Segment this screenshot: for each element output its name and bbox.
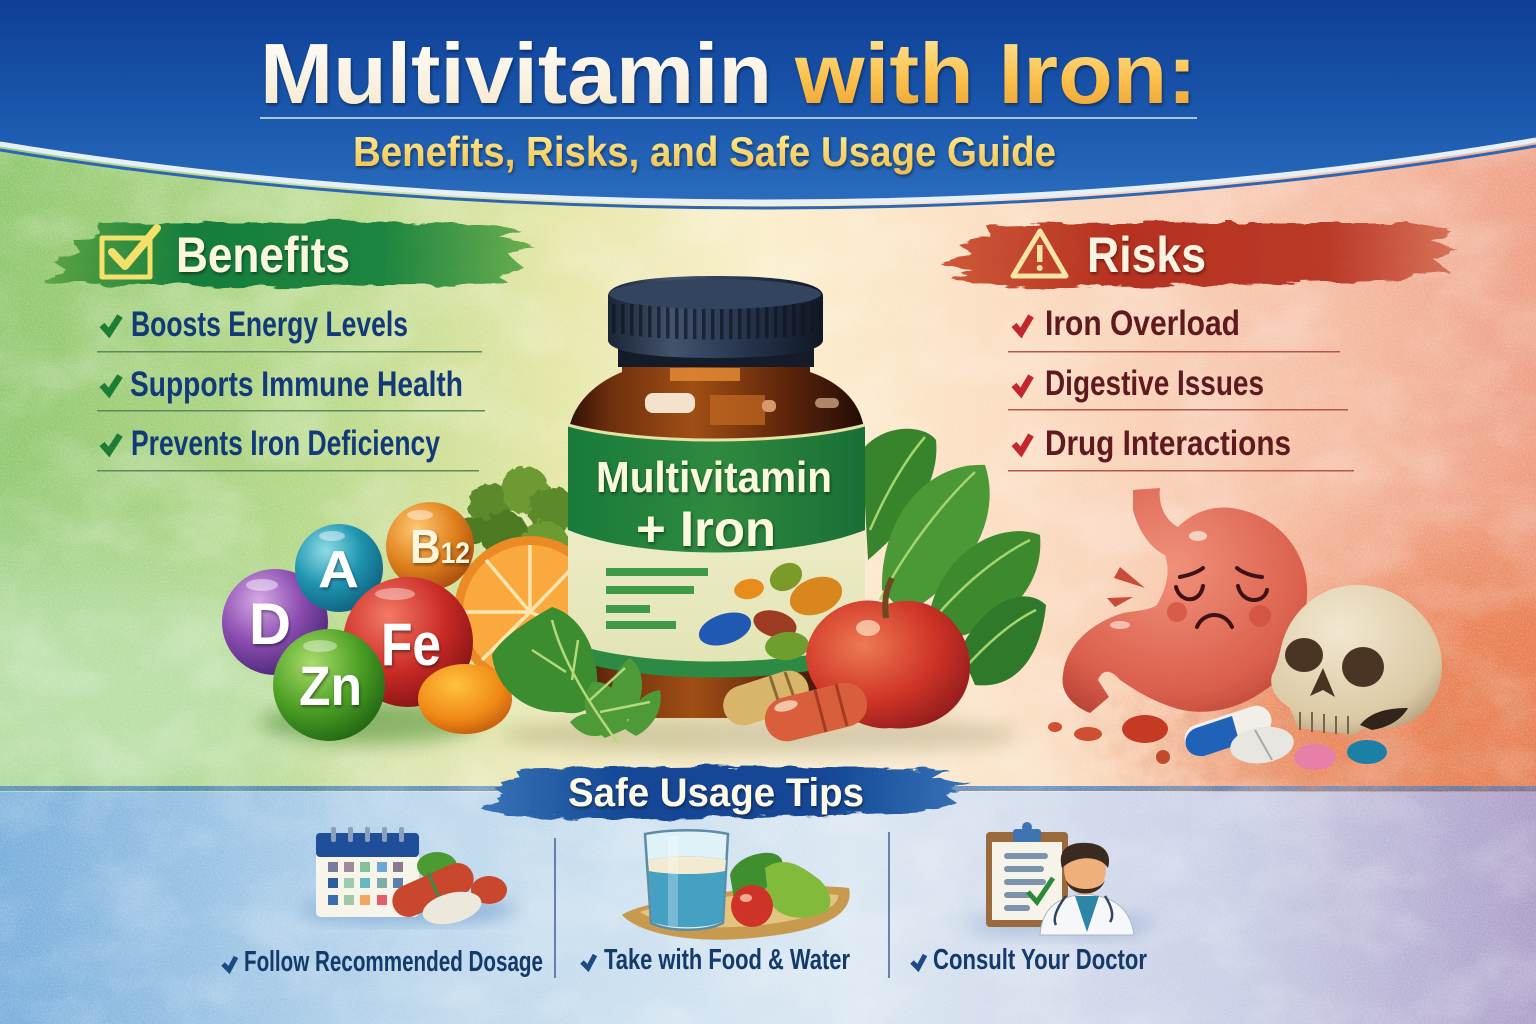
benefit item: iron: Prevents Iron Deficiency [131, 424, 440, 463]
risk item: overload [1008, 304, 1340, 352]
benefits heading [42, 221, 533, 287]
icon: vitamin balls [222, 502, 512, 741]
icon: capsules front [718, 665, 872, 746]
icon: parsley [461, 466, 576, 569]
benefit item: energy: Boosts Energy Levels [131, 305, 408, 344]
icon: sad stomach [1062, 488, 1307, 713]
panel: benefits [42, 221, 533, 472]
risks heading [940, 223, 1458, 287]
bottle label: + Iron [636, 501, 776, 557]
title: with Iron: [794, 27, 1197, 122]
icon: orange slice [454, 536, 606, 688]
icon: apple [806, 578, 970, 728]
title: Multivitamin [260, 27, 772, 122]
vitamin B12: B12 [410, 521, 470, 574]
icon: water glass and food plate [622, 830, 850, 940]
zinc Zn [273, 629, 385, 741]
risk item: drug [1008, 424, 1354, 472]
title [260, 27, 1197, 122]
icon: clipboard and doctor [965, 822, 1155, 937]
vitamin B12 [386, 502, 474, 590]
bottle [568, 276, 865, 718]
label text lines [606, 568, 708, 629]
bottle label [568, 425, 865, 678]
vitamin D: D [249, 592, 291, 657]
vitamin D [222, 569, 328, 675]
risk item: drug: Drug Interactions [1045, 424, 1291, 463]
tip text: dosage [223, 946, 543, 978]
icon: calendar and pills [300, 827, 520, 930]
icon: scattered pills [1048, 702, 1387, 770]
bottle cap [608, 276, 823, 367]
benefit list [97, 305, 485, 472]
bottle glass [568, 358, 865, 718]
zinc Zn: Zn [299, 654, 362, 717]
background: safe usage band [0, 792, 1536, 1024]
risk item: digestive [1008, 364, 1348, 410]
tip text: food: Take with Food & Water [604, 944, 850, 976]
bottle label: Multivitamin [596, 453, 832, 502]
icon: warning [1013, 231, 1066, 276]
background: benefits and risks gradient [0, 130, 1536, 890]
heading: safe usage tips [480, 766, 973, 820]
panel: tip doctor [888, 822, 1155, 978]
icon: skull [1271, 585, 1442, 735]
risk item: digestive: Digestive Issues [1045, 364, 1264, 403]
risks heading: Risks [1087, 227, 1206, 283]
risk list [1008, 304, 1354, 472]
label pills [695, 557, 848, 662]
panel: tip food [554, 830, 850, 978]
tip text: doctor: Consult Your Doctor [933, 944, 1147, 976]
header banner [0, 0, 1536, 208]
panel: risks [940, 223, 1458, 472]
risk item: overload: Iron Overload [1045, 304, 1240, 343]
icon: leafy greens behind apple [862, 429, 1046, 685]
panel: tip dosage [223, 827, 543, 978]
tip text: dosage: Follow Recommended Dosage [244, 946, 543, 978]
subtitle: Benefits, Risks, and Safe Usage Guide [353, 128, 1056, 175]
heading: safe usage tips: Safe Usage Tips [568, 771, 864, 815]
ground shadow under central illustration [260, 700, 1020, 755]
benefits heading: Benefits [176, 227, 350, 283]
benefit item: iron [97, 424, 479, 472]
vitamin A [295, 524, 383, 612]
icon: checkbox [102, 228, 157, 277]
benefit item: immune [97, 365, 485, 412]
icon: spinach left [492, 607, 661, 743]
orange gel capsule [418, 664, 512, 734]
stomach face [1176, 568, 1267, 627]
benefit item: immune: Supports Immune Health [130, 365, 463, 404]
iron Fe [343, 577, 473, 707]
iron Fe: Fe [381, 611, 441, 678]
vitamin A: A [318, 541, 359, 599]
